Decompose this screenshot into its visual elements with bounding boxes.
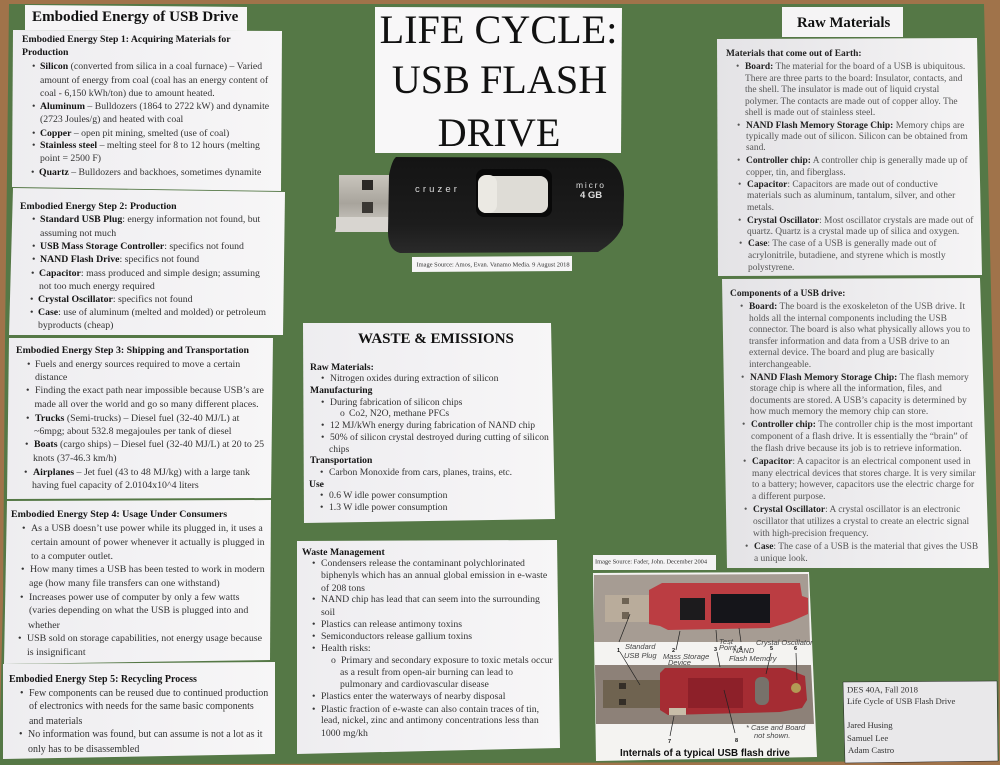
- list: components: Capacitor: [752, 457, 792, 467]
- list: step 2 components: : use of aluminum (melted and molded) or petroleum: [58, 307, 266, 318]
- list: components: The board is the exoskeleton of the USB drive. It: [780, 302, 965, 312]
- panel: course credits: Adam Castro: [848, 745, 895, 755]
- part numbers: 7: [668, 739, 671, 745]
- capacitor: [791, 683, 801, 693]
- heading: step 3: Embodied Energy Step 3: Shipping and Transportation: [16, 345, 250, 356]
- list: step 2 components: •: [32, 254, 35, 265]
- list: components: holds all the internal components including the USB: [749, 314, 947, 324]
- photo caption: Internals of a typical USB flash drive: [620, 748, 790, 759]
- list: step 3 transport: made all over the world and go so many different places.: [34, 399, 259, 410]
- list: step 2 components: •: [30, 307, 33, 318]
- list: components: transfer information and data from a USB drive to an: [749, 336, 950, 347]
- list: manufacturing: •: [321, 397, 324, 408]
- top flash memory chip: [711, 594, 770, 623]
- list: step 3 transport: Boats: [34, 439, 58, 450]
- list: components: The controller chip is the most important: [818, 420, 973, 430]
- list: step 3 transport: (cargo ships) – Diesel fuel (32-40 MJ/L) at 20 to 25: [60, 439, 264, 450]
- list: step 3 transport: [24, 359, 265, 491]
- list: step 4 usage: •: [22, 523, 25, 534]
- list: manufacturing: [310, 385, 549, 455]
- list: waste management: as a result from open-air burning can lead to: [340, 667, 513, 678]
- list: step 2 components: byproducts (cheap): [38, 320, 113, 331]
- list: materials: typically made out of silicon. Silicon can be obtained from: [746, 131, 968, 142]
- list: waste management: lead, nickel, zinc and antimony concentrations less than: [321, 715, 539, 726]
- list: step 5 recycling: only has to be disassembled: [28, 744, 139, 755]
- list: waste management: 1000 mg/kh: [321, 728, 368, 739]
- heading: step 1: [22, 34, 231, 58]
- list: waste management: biphenyls which has an annual global emission in e-waste: [321, 570, 547, 581]
- list: step 1 materials: Copper: [40, 128, 72, 139]
- list: step 4 usage: (varies depending on what the USB is plugged into and: [29, 605, 248, 616]
- list: raw materials: Nitrogen oxides during extraction of silicon: [330, 373, 499, 384]
- list: step 3 transport: Airplanes: [33, 467, 74, 478]
- top controller chip: [680, 598, 705, 620]
- panel: course credits: DES 40A, Fall 2018: [847, 684, 919, 694]
- handwritten notes: NAND: [733, 646, 755, 655]
- panel: components of a USB drive: [722, 278, 989, 568]
- list: components: external device. The board and plug are basically: [749, 348, 935, 358]
- bottom board trace area: [688, 678, 743, 708]
- list: step 3 transport: •: [27, 359, 30, 370]
- panel: course credits: [843, 681, 998, 763]
- list: step 2 components: assuming not much: [40, 228, 116, 239]
- list: materials: polymer. The contacts are made out of copper alloy. The: [745, 96, 958, 107]
- list: step 4 usage: to a computer outlet.: [31, 551, 113, 562]
- list: materials: [736, 61, 974, 273]
- list: waste management: of 208 tons: [321, 583, 365, 594]
- list: raw materials: •: [321, 373, 324, 384]
- list: step 2 components: : specifics not found: [119, 254, 199, 265]
- list: materials: copper, tin, and fiberglass.: [746, 167, 846, 178]
- list: step 5 recycling: of electronics with needs for the same basic components: [29, 701, 254, 712]
- list: step 2 components: •: [32, 241, 35, 252]
- list: waste management: soil: [321, 607, 335, 618]
- list: waste management: •: [312, 619, 315, 630]
- image: internals of a typical USB flash drive: [593, 572, 817, 761]
- list: step 2 components: : energy information not found, but: [122, 214, 260, 225]
- list: step 4 usage: age (how many file transfers can one withstand): [29, 578, 220, 589]
- panel: step 5 recycling process: [3, 662, 275, 759]
- list: step 3 transport: •: [26, 413, 29, 424]
- list: components: •: [741, 373, 744, 383]
- part numbers: 5: [770, 646, 773, 652]
- list: components: •: [742, 420, 745, 430]
- list: components: connector. The board is also what physically allows you to: [749, 325, 970, 335]
- part numbers: 8: [735, 738, 738, 744]
- list: components: : A crystal oscillator is an electronic: [825, 505, 960, 515]
- handwritten notes: Flash Memory: [729, 654, 778, 663]
- list: materials: Case: [748, 239, 767, 249]
- list: step 3 transport: having fuel capacity of 2.0104x10^4 liters: [32, 480, 199, 491]
- list: components: •: [745, 542, 748, 552]
- list: components: documents are stored. A USB’s capacity is determined by: [750, 396, 967, 406]
- panel: step 3 shipping and transportation: [7, 338, 273, 499]
- title panel: LIFE CYCLE:: [380, 7, 617, 52]
- list: waste management: Primary and secondary exposure to toxic metals occur: [341, 655, 554, 666]
- list: step 2 components: not too much energy required: [39, 281, 155, 292]
- heading: components: Components of a USB drive:: [730, 289, 845, 299]
- image source caption: Fader: Image Source: Fader, John. December 2004: [595, 558, 708, 566]
- panel: step 2 production: [9, 188, 285, 335]
- list: waste management: Semiconductors release gallium toxins: [321, 631, 472, 642]
- bottom photo band: [595, 665, 814, 724]
- panel: raw materials heading: Raw Materials: [797, 15, 891, 31]
- list: step 4 usage: certain amount of power whenever it actually is plugged in: [31, 537, 265, 548]
- list: waste management: Condensers release the contaminant polychlorinated: [321, 558, 525, 569]
- image source caption: Amos: Image Source: Amos, Evan. Vanamo Media. 9 August 2018: [416, 262, 570, 268]
- list: materials: quartz. Quartz is a crystal made up of silica and oxygen.: [747, 226, 959, 237]
- list: step 1 materials: – melting steel for 8 to 12 hours (melting: [100, 140, 260, 151]
- list: materials: : Capacitors are made out of conductive: [787, 180, 938, 190]
- photo leader lines: [619, 614, 797, 736]
- list: materials: NAND Flash Memory Storage Chip:: [746, 121, 893, 131]
- list: step 4 usage: is insignificant: [27, 647, 86, 658]
- list: materials: Memory chips are: [896, 121, 964, 131]
- list: step 1 materials: amount of energy from coal (coal has an energy content of: [40, 75, 269, 86]
- list: manufacturing: During fabrication of silicon chips: [330, 397, 463, 408]
- list: materials: Controller chip:: [746, 156, 811, 166]
- list: step 3 transport: •: [24, 467, 27, 478]
- brand label: cruzer: [415, 184, 460, 195]
- part numbers: 1: [617, 648, 620, 654]
- list: waste management: •: [312, 691, 315, 702]
- heading: step 5: Embodied Energy Step 5: Recycling Process: [9, 674, 197, 685]
- list: waste management: Plastics enter the waterways of nearby disposal: [321, 691, 506, 702]
- handwritten notes: Test: [719, 637, 734, 646]
- list: step 1 materials: Quartz: [39, 167, 69, 178]
- metal plug: [335, 175, 392, 232]
- list: step 1 materials: (converted from silica in a coal furnace) – Varied: [71, 61, 262, 72]
- list: waste management: [312, 558, 554, 739]
- list: materials: materials such as aluminum, tantalum, silver, and other: [747, 191, 956, 201]
- list: components: a unique look.: [754, 554, 808, 564]
- list: step 1 materials: (2723 Joules/g) and heated with coal: [40, 114, 184, 125]
- list: use: [309, 479, 448, 513]
- handwritten notes: Point: [719, 643, 737, 652]
- handwritten notes: not shown.: [754, 731, 790, 740]
- list: step 5 recycling: Few components can be reused due to continued production: [29, 688, 268, 699]
- list: step 1 materials: – Bulldozers and backhoes, sometimes dynamite: [71, 167, 261, 178]
- list: components: Case: [754, 542, 773, 552]
- list: step 3 transport: distance: [35, 372, 68, 383]
- list: materials: •: [738, 216, 741, 226]
- list: step 4 usage: Increases power use of computer by only a few watts: [29, 592, 240, 603]
- list: step 2 components: •: [31, 268, 34, 279]
- list: step 1 materials: coal - 6,150 kWh/ton) due to amount heated.: [40, 88, 215, 99]
- list: step 5 recycling: No information was found, but can assume is not a lot as it: [28, 729, 263, 740]
- list: step 5 recycling: [19, 688, 268, 755]
- list: step 1 materials: •: [32, 101, 35, 112]
- list: components: the flash drive because its job is to retrieve information.: [751, 443, 962, 454]
- list: waste management: Plastic fraction of e-waste can also contain traces of tin,: [321, 704, 539, 715]
- list: use: 0.6 W idle power consumption: [329, 490, 448, 501]
- list: step 4 usage: whether: [28, 620, 61, 631]
- list: waste management: •: [312, 704, 315, 715]
- list: step 1 materials: •: [32, 128, 35, 139]
- list: step 3 transport: (Semi-trucks) – Diesel fuel (32-40 MJ/L) at: [67, 413, 239, 424]
- part numbers: [617, 646, 797, 745]
- list: step 2 components: Case: [38, 307, 59, 318]
- list: step 2 components: Capacitor: [39, 268, 82, 279]
- bottom plug: [603, 680, 660, 708]
- list: step 5 recycling: and materials: [29, 716, 83, 727]
- part numbers: 3: [714, 647, 717, 653]
- list: step 2 components: •: [32, 214, 35, 225]
- list: materials: •: [739, 239, 742, 249]
- crystal oscillator: [755, 677, 769, 705]
- list: materials: : The case of a USB is generally made out of: [767, 239, 937, 249]
- list: step 4 usage: How many times a USB has been tested to work in modern: [30, 564, 265, 575]
- list: materials: Board:: [745, 62, 773, 72]
- handwritten notes: Standard: [625, 642, 656, 651]
- list: step 3 transport: – Jet fuel (43 to 48 MJ/kg) with a large tank: [77, 467, 250, 478]
- list: step 4 usage: As a USB doesn’t use power while its plugged in, it uses a: [31, 523, 263, 534]
- heading: step 2: Embodied Energy Step 2: Production: [20, 201, 177, 212]
- list: components: Crystal Oscillator: [753, 505, 825, 515]
- list: waste management: pulmonary and cardiovascular disease: [340, 679, 489, 690]
- list: waste management: Health risks:: [321, 643, 371, 654]
- list: step 3 transport: knots (37-46.3 km/h): [33, 453, 117, 464]
- list: components: oscillator that utilizes a crystal to create an electric signal: [753, 517, 970, 527]
- list: step 1 materials: [31, 61, 269, 178]
- list: components: interchangeable.: [749, 360, 811, 370]
- black drive body: [388, 157, 624, 253]
- list: step 1 materials: Stainless steel: [40, 140, 97, 151]
- list: step 2 components: •: [30, 294, 33, 305]
- list: components: NAND Flash Memory Storage Chip:: [750, 373, 897, 383]
- list: manufacturing: o: [340, 408, 345, 419]
- list: waste management: •: [312, 558, 315, 569]
- list: manufacturing: 12 MJ/kWh energy during fabrication of NAND chip: [330, 420, 535, 431]
- list: manufacturing: Manufacturing: [310, 385, 373, 396]
- list: components: •: [740, 302, 743, 312]
- list: materials: There are three parts to the board: Insulator, contacts, and: [745, 74, 963, 84]
- list: step 4 usage: •: [20, 592, 23, 603]
- panel: course credits: Jared Husing: [847, 720, 893, 730]
- list: components: The flash memory: [900, 373, 969, 383]
- heading: step 1: Production: [22, 47, 69, 58]
- panel: step 4 usage under consumers: [4, 500, 271, 664]
- list: materials: shell is made out of stainless steel.: [745, 107, 875, 118]
- list: components: Board:: [749, 302, 777, 312]
- list: materials: metals.: [747, 203, 774, 213]
- list: step 4 usage: [18, 523, 265, 658]
- top circuit board: [649, 583, 808, 630]
- heading: waste management: Waste Management: [302, 547, 385, 558]
- list: step 1 materials: point = 2500 F): [40, 153, 101, 164]
- list: use: •: [320, 502, 323, 513]
- list: step 2 components: Crystal Oscillator: [38, 294, 113, 305]
- panel: step 1 acquiring materials: [12, 30, 282, 191]
- handwritten notes: * Case and Board: [746, 723, 806, 732]
- panel: raw materials heading: [782, 7, 903, 37]
- list: materials: •: [738, 180, 741, 190]
- heading: waste and emissions: WASTE & EMISSIONS: [358, 331, 514, 347]
- list: materials: the shell. The insulator is made out of liquid crystal: [745, 84, 940, 95]
- image source caption: Amos: [412, 256, 572, 272]
- list: transportation: •: [320, 467, 323, 478]
- list: components: component of a flash drive. It is essentially the “brain” of: [751, 431, 969, 442]
- list: components: how much memory the memory chip can store.: [750, 407, 928, 417]
- list: transportation: [310, 455, 512, 478]
- heading: materials: Materials that come out of Earth:: [726, 49, 862, 59]
- list: waste management: Plastics can release antimony toxins: [321, 619, 462, 630]
- panel: course credits: Life Cycle of USB Flash Drive: [847, 696, 955, 706]
- list: raw materials: Raw Materials:: [310, 362, 374, 373]
- switch: [669, 708, 686, 715]
- list: materials: A controller chip is generally made up of: [813, 156, 968, 166]
- handwritten notes: Mass Storage: [663, 652, 709, 661]
- list: step 4 usage: •: [21, 564, 24, 575]
- list: step 3 transport: Trucks: [35, 413, 65, 424]
- list: manufacturing: Co2, N2O, methane PFCs: [349, 408, 449, 419]
- handwritten notes: Crystal Oscillator: [756, 638, 813, 647]
- list: raw materials: [310, 362, 499, 384]
- list: waste management: o: [331, 655, 336, 666]
- list: step 1 materials: •: [32, 61, 35, 72]
- capacity label: [576, 180, 606, 201]
- list: manufacturing: •: [321, 432, 324, 443]
- panel: embodied energy heading: [25, 5, 247, 31]
- list: transportation: Carbon Monoxide from cars, planes, trains, etc.: [329, 467, 512, 478]
- list: materials: Capacitor: [747, 180, 787, 190]
- image source caption: Fader: [593, 555, 716, 570]
- top photo band: [594, 574, 810, 642]
- list: step 2 components: Standard USB Plug: [40, 214, 122, 225]
- list: step 1 materials: Aluminum: [40, 101, 85, 112]
- title panel: USB FLASH: [392, 57, 607, 102]
- list: components: [740, 301, 978, 564]
- list: manufacturing: •: [321, 420, 324, 431]
- list: materials: acrylonitrile, butadiene, and styrene which is mostly: [748, 251, 946, 261]
- image: USB flash drive photo: [335, 157, 624, 253]
- capacity label: 4 GB: [580, 190, 602, 201]
- list: materials: •: [737, 121, 740, 131]
- list: waste management: NAND chip has lead that can seem into the surrounding: [321, 594, 540, 605]
- photo paper: [593, 572, 817, 761]
- list: manufacturing: chips: [329, 444, 350, 455]
- list: materials: The material for the board of a USB is ubiquitous.: [776, 62, 965, 72]
- panel: embodied energy heading: Embodied Energy of USB Drive: [32, 9, 239, 25]
- panel: course credits: Samuel Lee: [847, 733, 888, 743]
- handwritten notes: Device: [668, 658, 691, 667]
- list: transportation: Transportation: [310, 455, 373, 466]
- list: step 2 components: : specifics not found: [164, 241, 244, 252]
- list: step 3 transport: Fuels and energy sources required to move a certain: [35, 359, 240, 370]
- list: components: with high-precision frequency.: [753, 528, 868, 539]
- top plug: [605, 595, 650, 622]
- list: step 1 materials: •: [32, 140, 35, 151]
- list: step 1 materials: Silicon: [40, 61, 69, 72]
- part numbers: 6: [794, 646, 797, 652]
- list: step 3 transport: ~6mpg; about 532.8 megajoules per tank of diesel: [34, 426, 232, 437]
- handwritten notes: [624, 637, 813, 740]
- list: step 3 transport: •: [25, 439, 28, 450]
- part numbers: 4: [739, 646, 743, 652]
- list: step 2 components: [30, 214, 266, 331]
- list: materials: polystyrene.: [748, 263, 794, 273]
- slider window: [476, 169, 552, 217]
- list: step 2 components: : specifics not found: [113, 294, 193, 305]
- part numbers: 2: [672, 648, 675, 654]
- title panel: [375, 7, 622, 155]
- list: use: •: [320, 490, 323, 501]
- list: step 2 components: : mass produced and simple design; assuming: [81, 268, 260, 279]
- title panel: DRIVE: [438, 110, 560, 155]
- list: components: Controller chip:: [751, 420, 816, 430]
- list: materials: •: [737, 156, 740, 166]
- panel: waste and emissions: [303, 323, 555, 523]
- list: step 4 usage: USB sold on storage capabilities, not energy usage because: [27, 633, 263, 644]
- list: step 5 recycling: •: [20, 688, 24, 699]
- list: materials: •: [736, 62, 739, 72]
- list: waste management: •: [312, 594, 315, 605]
- list: step 1 materials: •: [31, 167, 34, 178]
- list: materials: : Most oscillator crystals are made out of: [819, 216, 973, 226]
- list: waste management: •: [312, 643, 315, 654]
- list: waste management: •: [312, 631, 315, 642]
- list: components: to a battery; however, capacitors use the electric charge for: [752, 479, 975, 490]
- list: step 1 materials: – Bulldozers (1864 to 2722 kW) and dynamite: [87, 101, 269, 112]
- capacity label: micro: [576, 180, 606, 190]
- list: step 3 transport: Finding the exact path near impossible because USB’s are: [35, 385, 265, 396]
- list: materials: sand.: [746, 143, 766, 153]
- list: components: : A capacitor is an electrical component used in: [792, 457, 971, 467]
- list: step 2 components: USB Mass Storage Controller: [40, 241, 165, 252]
- handwritten notes: USB Plug: [624, 651, 657, 660]
- list: step 5 recycling: •: [19, 729, 22, 740]
- heading: step 4: Embodied Energy Step 4: Usage Under Consumers: [11, 509, 227, 520]
- panel: materials that come out of earth: [717, 38, 982, 276]
- list: components: : The case of a USB is the material that gives the USB: [773, 542, 978, 552]
- list: use: 1.3 W idle power consumption: [329, 502, 448, 513]
- list: use: Use: [309, 479, 325, 490]
- list: step 3 transport: •: [26, 385, 29, 396]
- list: components: •: [743, 457, 746, 467]
- list: components: a different purpose.: [752, 491, 825, 502]
- list: components: many electrical devices that stores charge. It is very similar: [752, 469, 976, 479]
- list: step 2 components: NAND Flash Drive: [40, 254, 120, 265]
- list: manufacturing: 50% of silicon crystal destroyed during cutting of silicon: [330, 432, 549, 443]
- bottom circuit board: [660, 668, 807, 715]
- heading: step 1: Embodied Energy Step 1: Acquiring Materials for: [22, 34, 231, 45]
- list: components: •: [744, 505, 747, 515]
- list: step 4 usage: •: [18, 633, 21, 644]
- list: materials: Crystal Oscillator: [747, 216, 819, 226]
- list: step 1 materials: – open pit mining, smelted (use of coal): [74, 128, 229, 139]
- list: components: storage chip is where all the information, files, and: [750, 383, 942, 394]
- panel: waste management: [297, 540, 560, 754]
